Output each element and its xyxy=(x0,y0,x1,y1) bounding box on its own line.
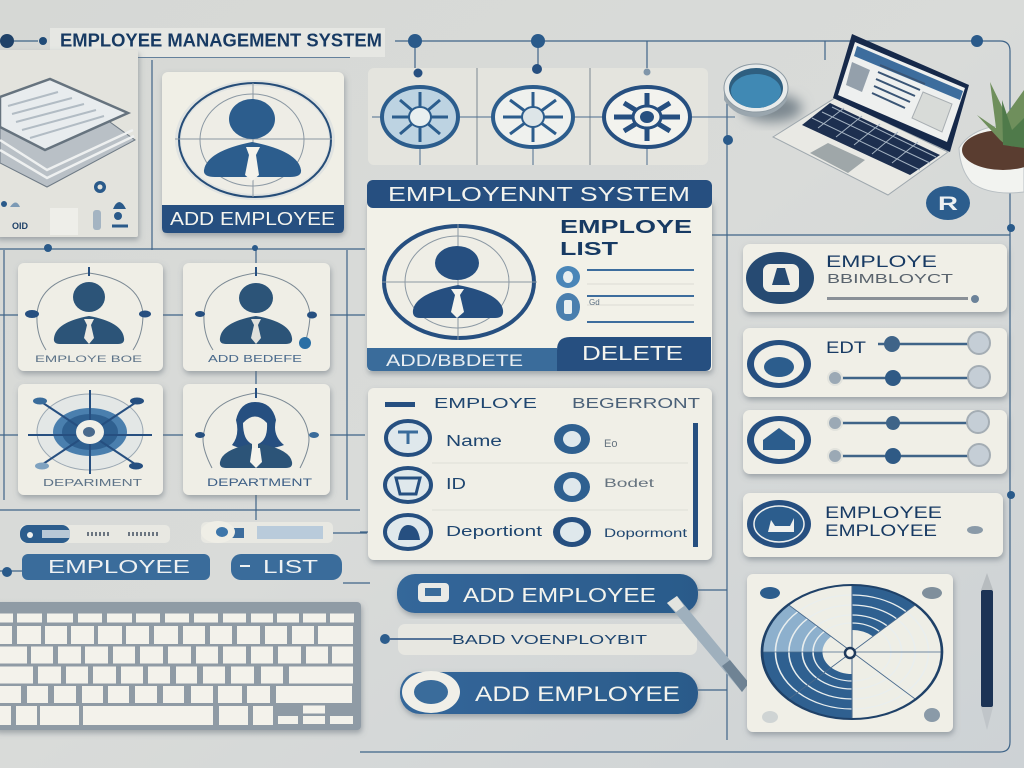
button: employee: EMPLOYEE xyxy=(48,557,190,577)
card: edit sliders: EDT xyxy=(826,338,866,357)
row: name: Name xyxy=(446,433,502,450)
row: department: Deportiont xyxy=(446,524,542,540)
card: department woman xyxy=(183,384,330,495)
card: radial chart xyxy=(747,574,953,732)
icon row: three dial icons xyxy=(368,64,735,165)
button: delete xyxy=(557,337,711,371)
card: edit sliders xyxy=(743,328,1007,397)
title: EMPLOYEE MANAGEMENT SYSTEM xyxy=(60,30,382,50)
panel: add employee card xyxy=(162,72,344,233)
panel: employee details form xyxy=(368,388,712,560)
card: employee bio xyxy=(18,263,163,371)
button: employee xyxy=(22,554,210,580)
button: add employee secondary xyxy=(400,671,698,714)
card: department woman: DEPARTMENT xyxy=(207,477,312,489)
row: id xyxy=(385,468,655,502)
icon: small badge: R xyxy=(938,194,958,215)
bar: add employment xyxy=(380,624,697,655)
row: id: ID xyxy=(446,476,466,493)
heading: employment system banner: EMPLOYENNT SYSTEM xyxy=(388,184,690,206)
panel: add employee card: ADD EMPLOYEE xyxy=(170,209,335,229)
card: employee status xyxy=(743,244,1007,312)
panel: document stack: OID xyxy=(12,221,29,231)
icon: profile circle xyxy=(382,224,537,340)
icon: document stack xyxy=(0,79,135,187)
row: id: Bodet xyxy=(604,476,655,490)
panel: employee details form: EMPLOYE xyxy=(434,395,537,412)
card: employee employee xyxy=(743,493,1003,557)
list rows: Gd xyxy=(589,298,600,307)
button: add employee primary: ADD EMPLOYEE xyxy=(463,585,656,607)
title xyxy=(0,28,385,57)
card: settings sliders xyxy=(743,410,1007,474)
text: employee list: LIST xyxy=(560,238,619,259)
panel: employee details form: BEGERRONT xyxy=(572,395,700,412)
card: add bedete xyxy=(183,263,330,371)
row: name xyxy=(386,421,617,455)
button: list: LIST xyxy=(263,557,318,577)
small status chip right xyxy=(201,521,333,543)
panel: employment system xyxy=(367,180,712,371)
panel: document stack xyxy=(0,50,138,237)
button: add/bbdete xyxy=(367,348,557,371)
card: department target xyxy=(18,384,163,495)
keyboard xyxy=(0,602,361,730)
card: employee status: BBIMBLOYCT xyxy=(827,271,953,286)
card: add bedete: ADD BEDEFE xyxy=(208,354,302,365)
card: employee employee: EMPLOYEE xyxy=(825,503,942,522)
icon: small badge xyxy=(926,186,970,220)
icon: profile dial xyxy=(175,83,332,197)
card: employee status: EMPLOYE xyxy=(826,252,937,271)
button: delete: DELETE xyxy=(582,343,683,365)
row: department: Dopormont xyxy=(604,526,688,540)
icon: laptop xyxy=(773,34,969,195)
text: employee list: EMPLOYE xyxy=(560,216,692,237)
button: list xyxy=(231,554,342,580)
text: employee list xyxy=(560,216,692,259)
card: department target: DEPARIMENT xyxy=(43,477,143,489)
row: department xyxy=(385,515,688,549)
button: add/bbdete: ADD/BBDETE xyxy=(386,352,523,370)
icon: pen tool xyxy=(667,596,749,692)
card: employee bio: EMPLOYE BOE xyxy=(35,354,142,365)
icon: pen xyxy=(981,573,993,730)
small status chip left xyxy=(20,525,170,543)
radial chart xyxy=(762,585,942,719)
card: employee employee: EMPLOYEE xyxy=(825,521,937,540)
button: add employee secondary: ADD EMPLOYEE xyxy=(475,683,680,706)
button: add employee primary xyxy=(397,574,698,613)
list rows xyxy=(556,266,694,323)
bar: add employment: BADD VOENPLOYBIT xyxy=(452,632,647,647)
row: name: Eo xyxy=(604,438,617,450)
heading: employment system banner xyxy=(367,180,712,208)
icon: potted plant xyxy=(959,82,1024,193)
icon: water cup xyxy=(724,64,802,122)
